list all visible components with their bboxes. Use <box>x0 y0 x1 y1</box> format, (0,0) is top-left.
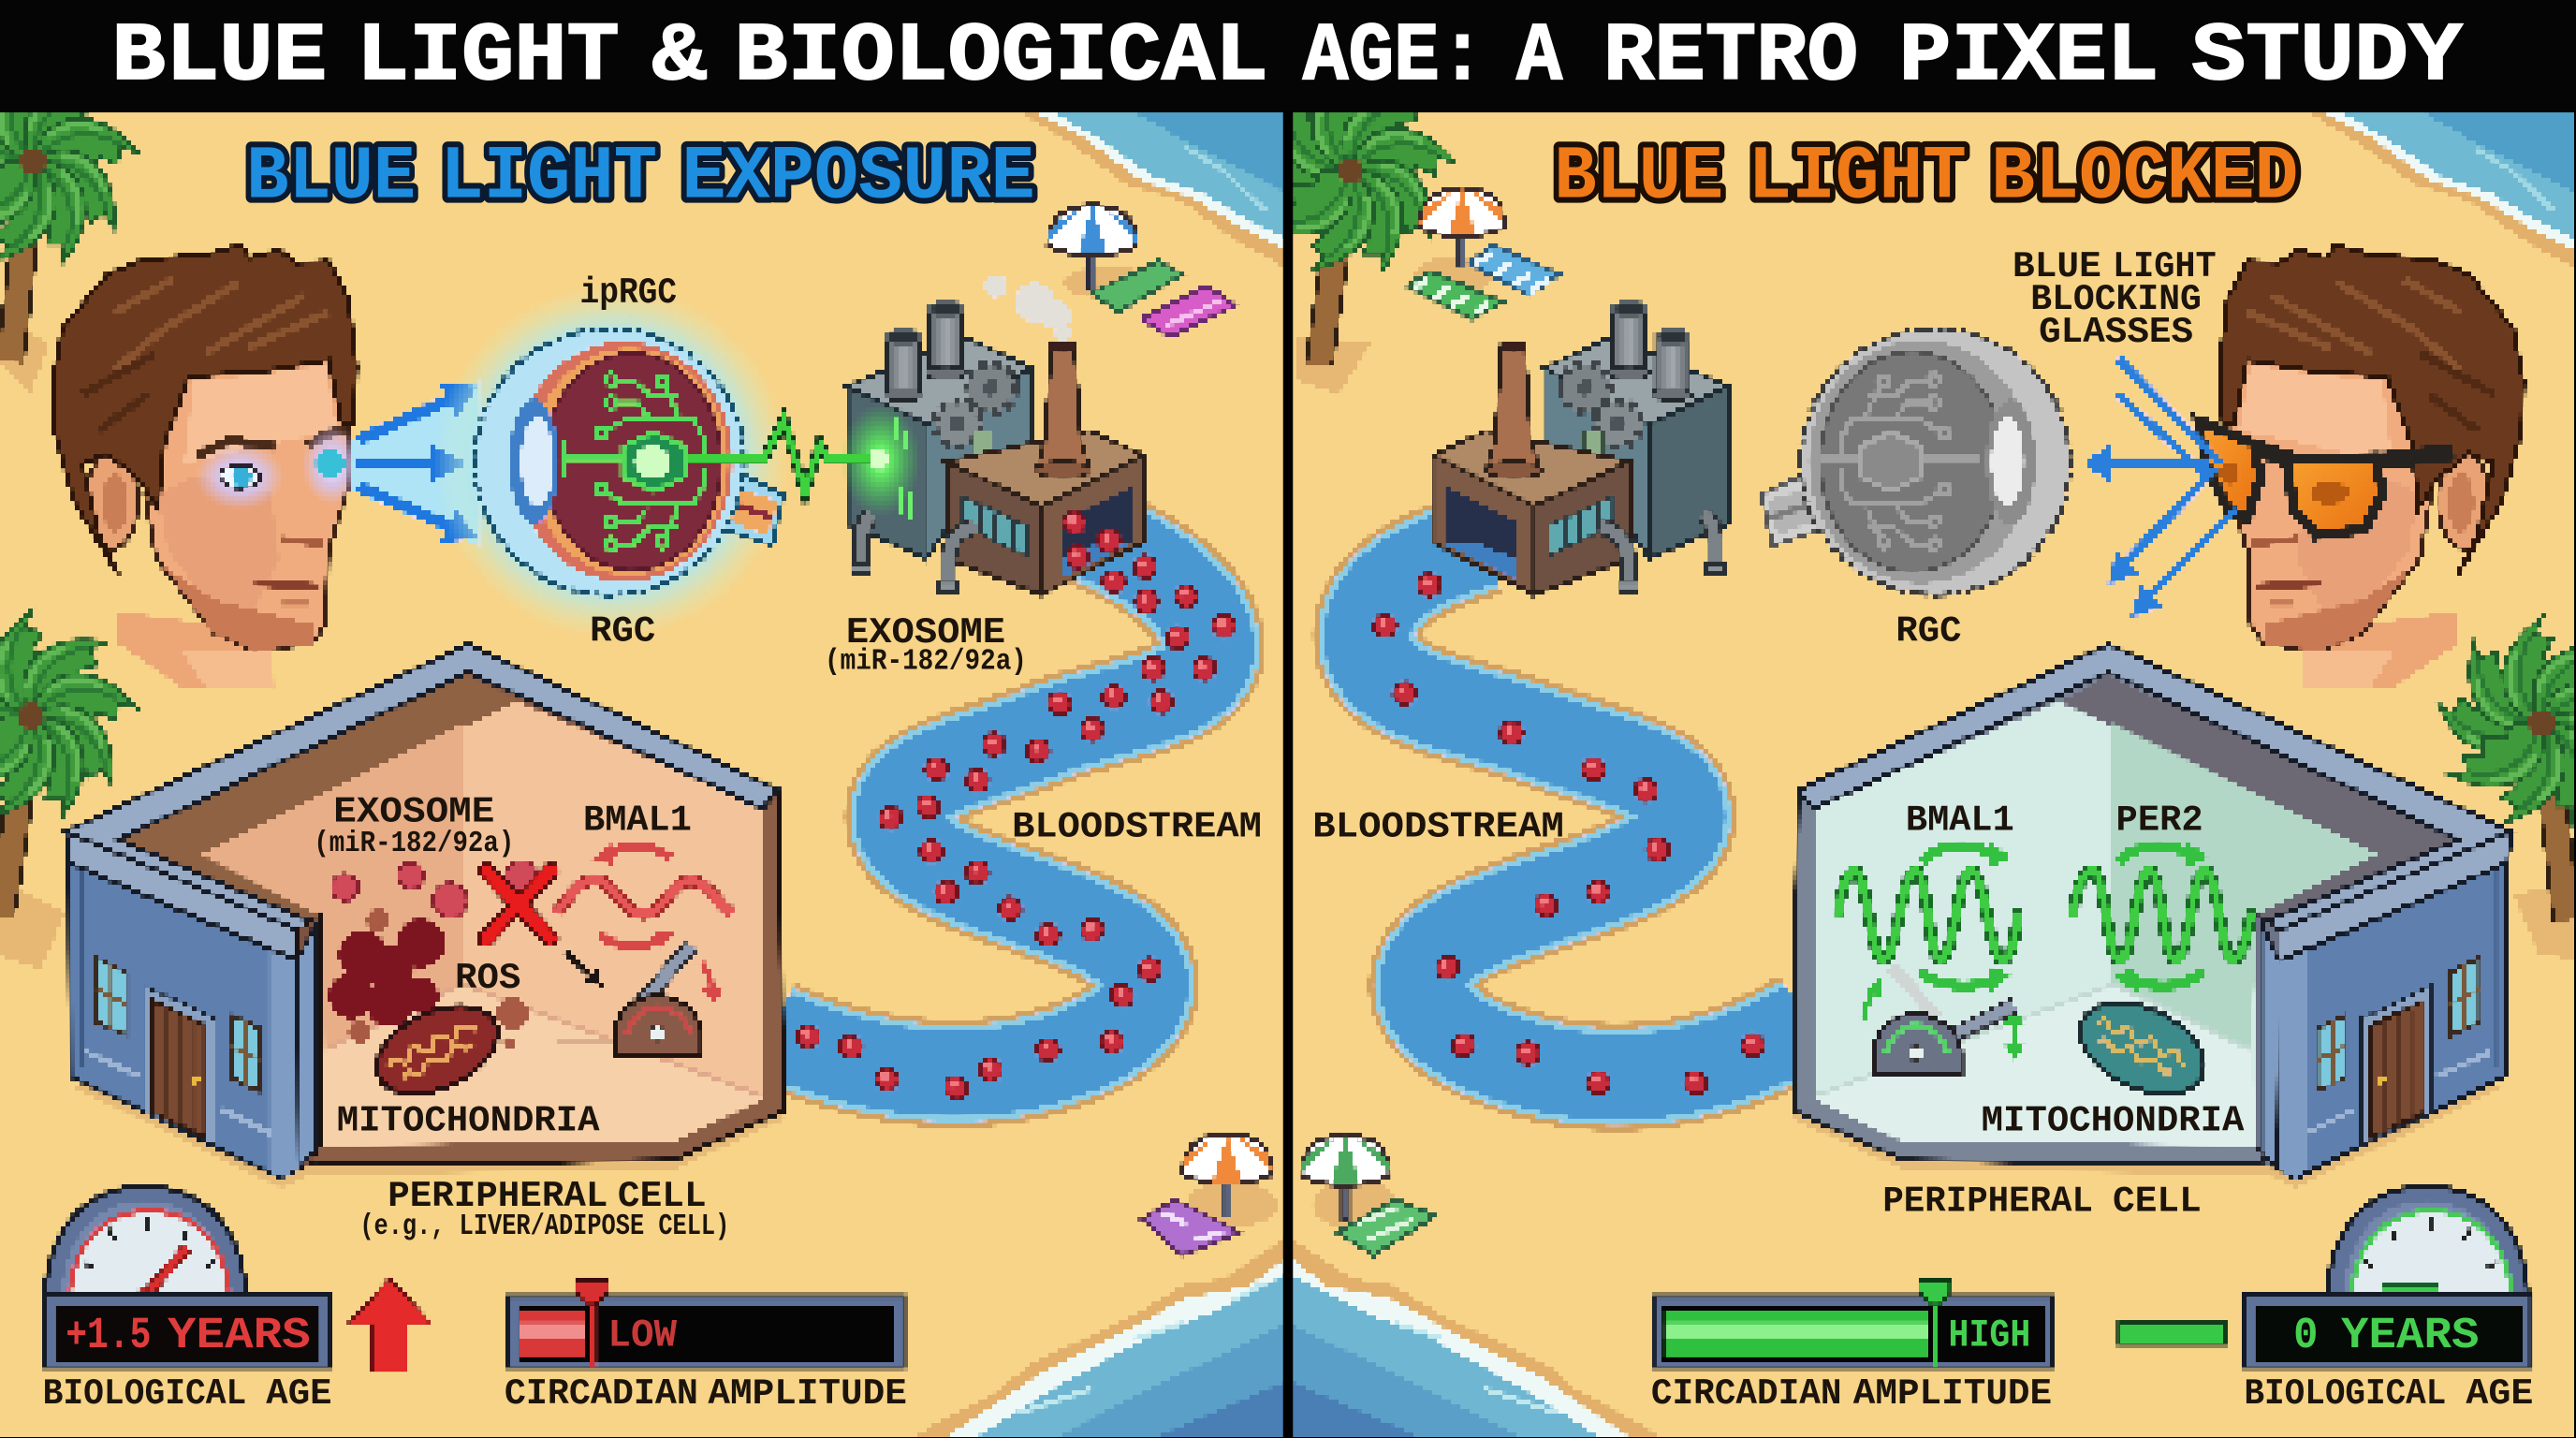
label: mitochondria left: MITOCHONDRIA <box>337 1101 600 1142</box>
title: BLUE <box>111 11 327 104</box>
black arrow to lever <box>565 951 603 988</box>
beach set: orange umbrella and striped towels, right panel <box>1406 189 1559 318</box>
label: peripheral cell right <box>1882 1181 2202 1223</box>
label: exosome: EXOSOME <box>846 612 1005 653</box>
title: LIGHT <box>357 11 620 104</box>
label: ROS: ROS <box>455 958 520 999</box>
ocean: bottom right of left panel <box>912 1236 1288 1438</box>
label: circadian amplitude right: AMPLITUDE <box>1853 1373 2052 1415</box>
peripheral cell: left damaged room <box>66 644 788 1188</box>
label: exosome in cell: EXOSOME <box>333 792 494 833</box>
label: BMAL1 right: BMAL1 <box>1906 800 2014 841</box>
heading: blue light exposure: EXPOSURE <box>681 136 1035 221</box>
gauge: biological age dial, left <box>44 1186 246 1308</box>
arrow: age up <box>348 1278 432 1372</box>
title: A <box>1516 11 1562 104</box>
label: circadian amplitude right <box>1651 1373 2052 1415</box>
beach set: green umbrella and green towel, right panel <box>1301 1136 1436 1255</box>
palm tree: top of right panel <box>1293 112 1456 393</box>
readout: +1.5 years <box>66 1312 311 1361</box>
ocean: top right of right panel <box>2306 111 2576 270</box>
mitochondrion: healthy <box>2066 985 2218 1112</box>
green BMAL1 wave <box>1838 871 2017 960</box>
label: cell example: (e.g., LIVER/ADIPOSE CELL) <box>359 1211 729 1243</box>
readout: 0 years: YEARS <box>2341 1312 2479 1361</box>
title bar <box>0 0 2576 112</box>
heading: blue light blocked: BLOCKED <box>1991 136 2298 221</box>
label: circadian amplitude left: AMPLITUDE <box>708 1373 907 1415</box>
glasses: orange blue-light blocking <box>2198 420 2454 536</box>
label: RGC right: RGC <box>1895 610 1962 652</box>
label: ipRGC: ipRGC <box>580 272 677 314</box>
title: AGE: <box>1303 11 1486 104</box>
lever switch: low position <box>559 945 701 1055</box>
green cycle arrows <box>1863 842 2210 1062</box>
exosome particles: right bloodstream <box>1374 574 1764 1094</box>
label: circadian amplitude left: CIRCADIAN <box>505 1373 698 1415</box>
label: biological age right: AGE <box>2466 1373 2533 1415</box>
ROS cluster <box>329 909 529 1050</box>
panel divider <box>1283 111 1293 1438</box>
readout: +1.5 years: YEARS <box>168 1312 311 1361</box>
signal wave from eye to factory <box>687 419 889 493</box>
exosome factory: right <box>1432 301 1728 594</box>
heading: blue light exposure: LIGHT <box>440 136 657 221</box>
exosome particles: left bloodstream <box>798 511 1235 1099</box>
label: PER2: PER2 <box>2116 800 2203 841</box>
readout panel: +1.5 years <box>44 1295 329 1367</box>
title: STUDY <box>2191 11 2463 104</box>
gauge: biological age dial, right <box>2326 1186 2528 1308</box>
readout: low: LOW <box>607 1313 678 1357</box>
mitochondrion: damaged <box>363 989 511 1111</box>
label: bloodstream left: BLOODSTREAM <box>1012 806 1262 847</box>
title <box>111 11 2463 104</box>
label: blocking glasses: GLASSES <box>2039 312 2193 353</box>
beach set: orange umbrella and purple towel <box>1142 1134 1278 1255</box>
title: PIXEL <box>1899 11 2159 104</box>
label: BMAL1 left: BMAL1 <box>583 800 692 841</box>
title: RETRO <box>1603 11 1858 104</box>
palm tree: lower left <box>0 609 139 970</box>
beach set: blue umbrella and towels <box>1048 205 1236 337</box>
heading: blue light blocked: LIGHT <box>1748 136 1967 221</box>
peripheral cell: right healthy room <box>1788 644 2511 1188</box>
label: peripheral cell right: CELL <box>2113 1181 2202 1223</box>
heading: blue light blocked: BLUE <box>1554 136 1723 221</box>
bloodstream: left river <box>772 526 1211 1074</box>
flattened red BMAL1 wave and arrows <box>557 843 733 1004</box>
readout panel: 0 years <box>2246 1295 2532 1367</box>
label: peripheral cell left: CELL <box>618 1176 707 1217</box>
label: blocking glasses: BLOCKING <box>2030 279 2202 320</box>
head: exposed face with glowing eyes <box>52 245 361 690</box>
title: & <box>652 11 707 104</box>
palm tree: top left <box>0 54 140 394</box>
amplitude bar: high <box>1653 1280 2052 1369</box>
smoke puffs: left factory <box>984 274 1071 342</box>
readout: 0 years: 0 <box>2293 1312 2318 1361</box>
arrows: blue light reflected by glasses <box>2083 359 2236 618</box>
heading: blue light blocked <box>1554 136 2298 221</box>
label: peripheral cell left <box>388 1176 707 1217</box>
label: RGC left: RGC <box>590 610 655 652</box>
label: miR-182/92a: (miR-182/92a) <box>825 645 1027 678</box>
eye: glowing retina with ipRGC <box>433 285 788 639</box>
label: bloodstream right: BLOODSTREAM <box>1312 806 1564 847</box>
label: peripheral cell right: PERIPHERAL <box>1882 1181 2093 1223</box>
label: blocking glasses: BLUE <box>2012 246 2101 287</box>
exosome factory: left <box>842 301 1144 594</box>
head: protected face <box>2219 245 2524 690</box>
readout: high: HIGH <box>1949 1313 2030 1357</box>
bloodstream: right river <box>1367 542 1808 1077</box>
heading: blue light exposure: BLUE <box>246 136 416 221</box>
palm tree: lower right <box>2434 616 2576 961</box>
heading: blue light exposure <box>246 136 1035 221</box>
light beam and blue arrows into eye <box>350 381 479 546</box>
readout: +1.5 years: +1.5 <box>66 1312 151 1361</box>
label: biological age left: AGE <box>266 1373 332 1415</box>
label: mitochondria right: MITOCHONDRIA <box>1982 1101 2245 1142</box>
exosome particles inside cell <box>332 861 537 917</box>
amplitude bar: low <box>509 1280 903 1369</box>
label: circadian amplitude left <box>505 1373 907 1415</box>
label: biological age left: BIOLOGICAL <box>43 1373 246 1415</box>
label: blocking glasses: LIGHT <box>2113 246 2217 287</box>
lever switch: high position <box>1873 966 2014 1075</box>
green PER2 wave <box>2073 871 2250 960</box>
ocean: bottom left of right panel <box>1288 1236 1664 1438</box>
eye: grey inactive retina <box>1761 329 2070 594</box>
label: circadian amplitude right: CIRCADIAN <box>1651 1373 1841 1415</box>
ocean: top right of left panel <box>1018 111 1288 270</box>
title: BIOLOGICAL <box>735 11 1268 104</box>
label: miR-182/92a in cell: (miR-182/92a) <box>314 828 514 860</box>
label: blocking glasses <box>2012 246 2217 353</box>
dash: no change <box>2119 1321 2224 1344</box>
label: peripheral cell left: PERIPHERAL <box>388 1176 607 1217</box>
red X over exosome <box>487 871 550 938</box>
label: biological age right: BIOLOGICAL <box>2244 1373 2446 1415</box>
